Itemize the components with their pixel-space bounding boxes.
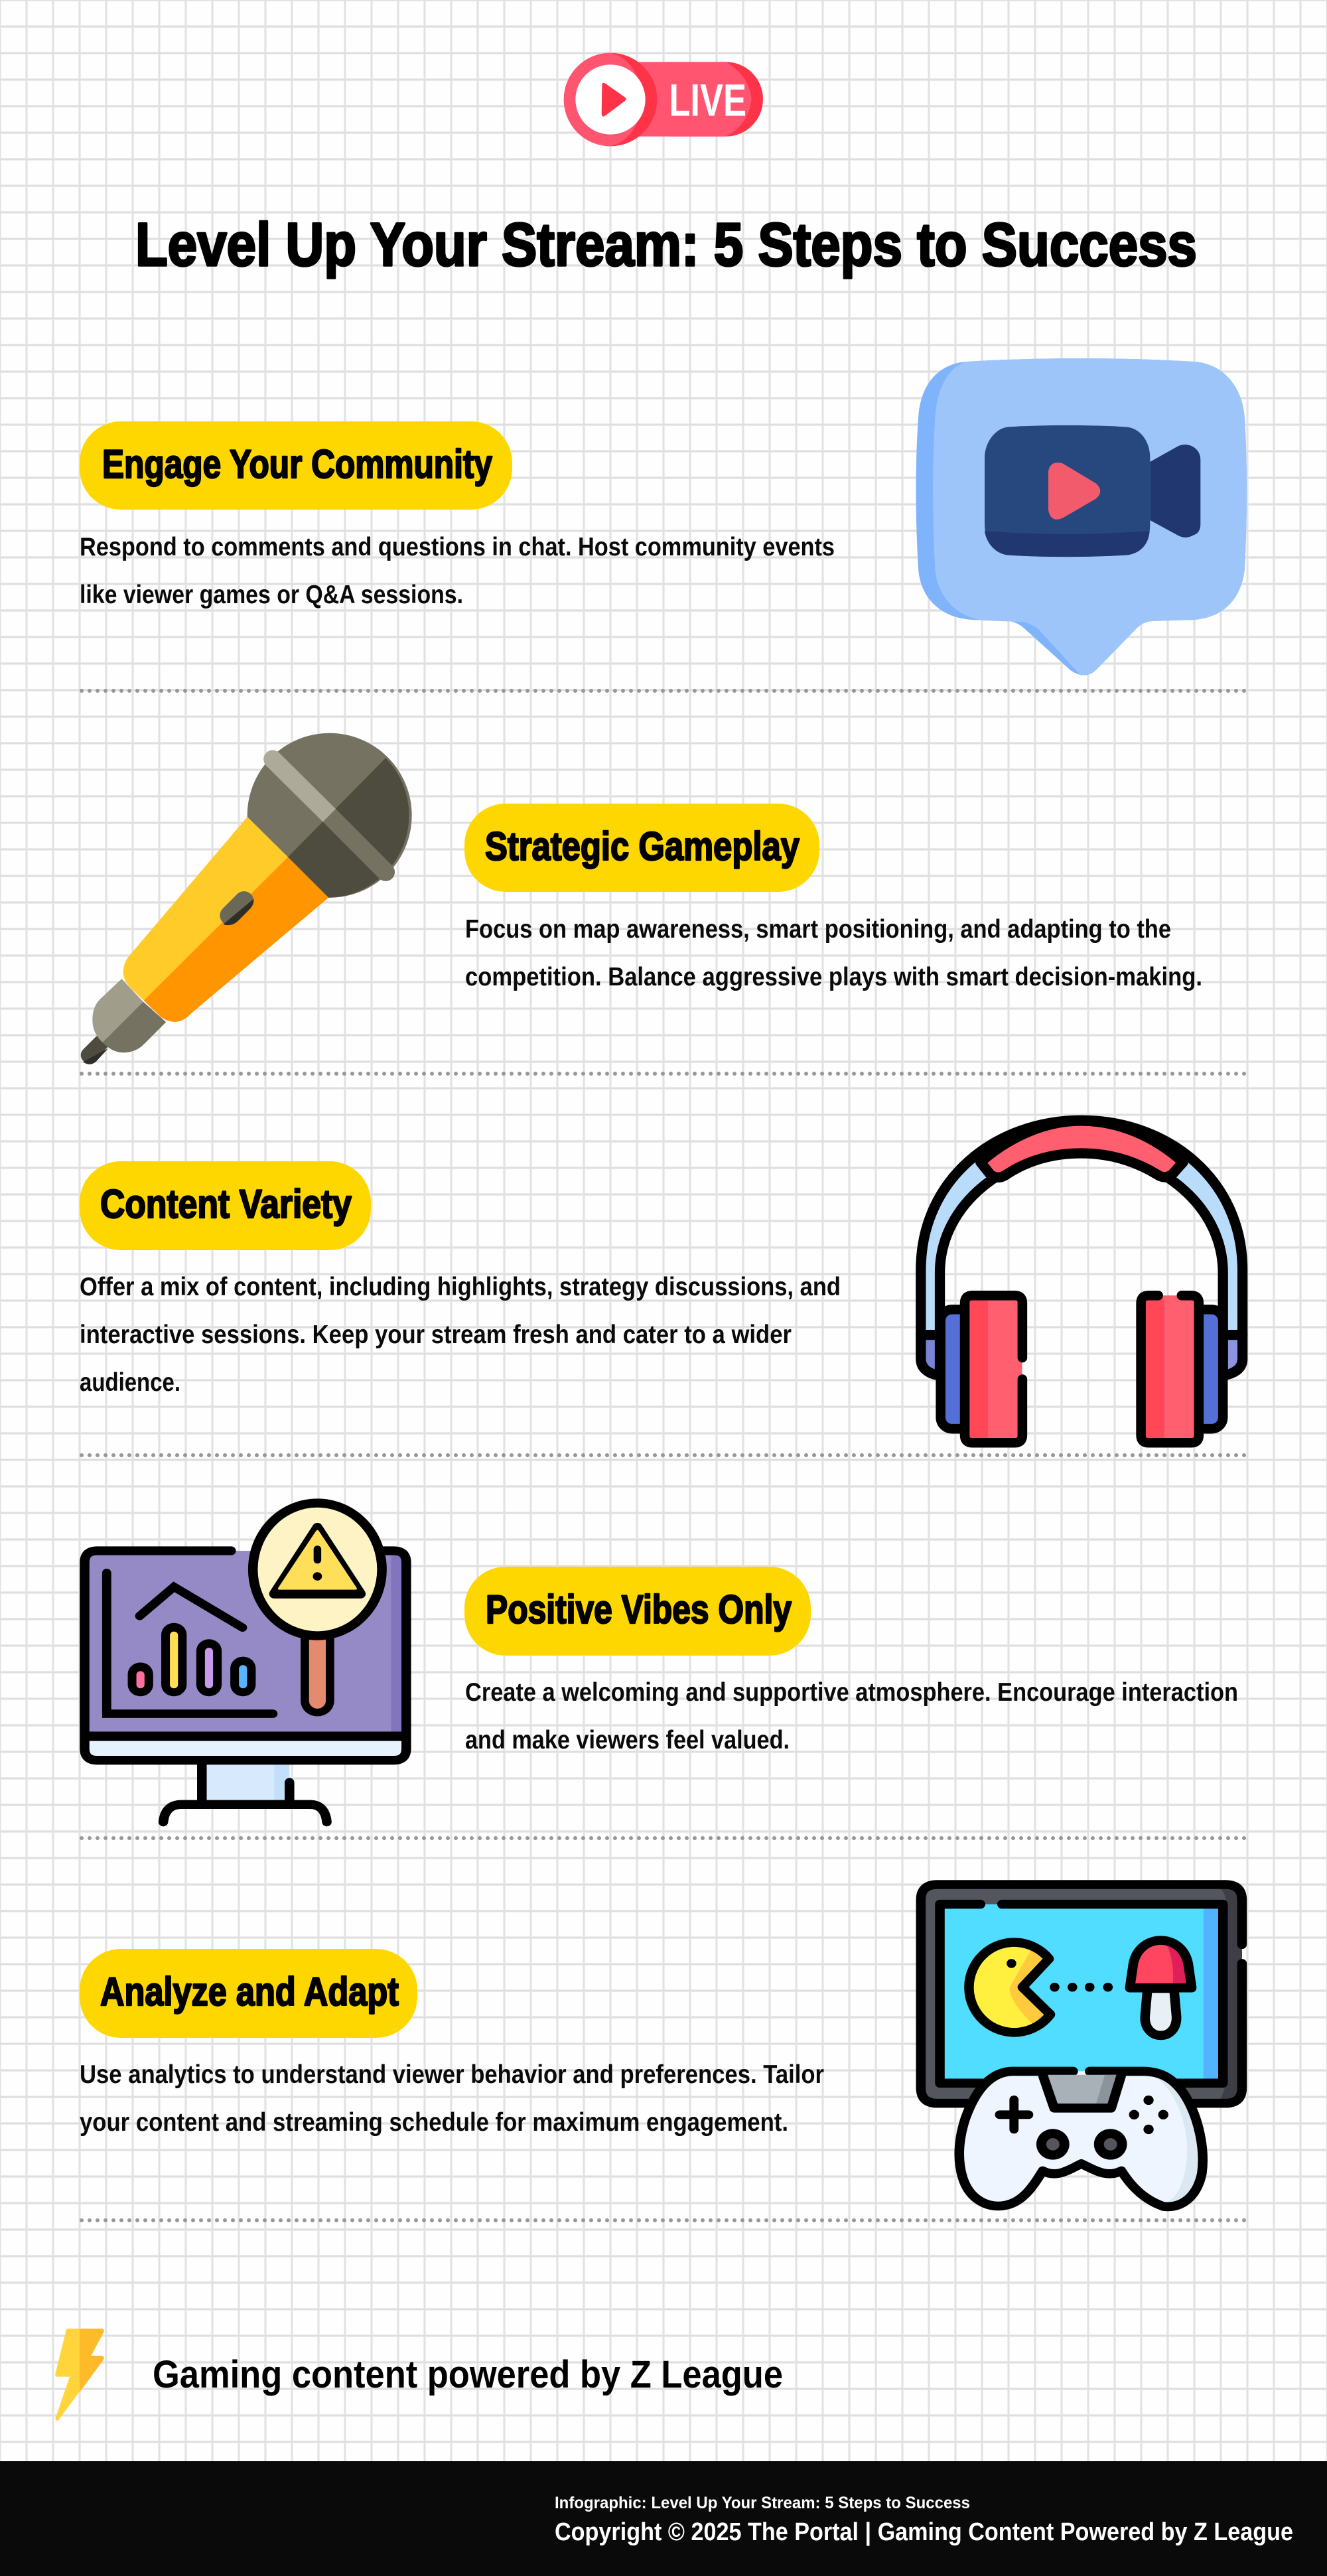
icon: retro game screen and controller	[921, 1885, 1242, 2206]
text block: audience.	[80, 1368, 180, 1397]
divider 3	[82, 1453, 1245, 1457]
icon: video chat bubble	[916, 358, 1247, 676]
mushroom	[1130, 1940, 1192, 2035]
text block: and make viewers feel valued.	[465, 1726, 790, 1754]
bar chart	[141, 1634, 243, 1685]
pacman	[969, 1942, 1050, 2033]
text block: Offer a mix of content, including highlights, strategy discussions, and	[80, 1273, 841, 1301]
heading pill: Strategic Gameplay	[485, 824, 800, 869]
text block	[80, 2060, 824, 2137]
camera	[985, 425, 1200, 557]
heading pill	[80, 421, 512, 510]
icon: microphone	[83, 733, 412, 1064]
sponsor line: Gaming content powered by Z League	[153, 2353, 783, 2396]
text block: Create a welcoming and supportive atmosphere. Encourage interaction	[465, 1678, 1238, 1707]
title: Level Up Your Stream: 5 Steps to Success	[135, 211, 1197, 279]
panel: strategic gameplay	[83, 733, 1202, 1064]
divider 1	[82, 689, 1245, 693]
game controller	[959, 2071, 1203, 2206]
text block	[465, 1678, 1238, 1754]
icon: analytics monitor with warning magnifier	[84, 1503, 406, 1822]
panel: analyze and adapt	[80, 1885, 1242, 2206]
heading pill	[464, 804, 819, 892]
icon: lightning bolt	[55, 2328, 104, 2421]
divider 2	[82, 1072, 1245, 1076]
panel: positive vibes only	[84, 1503, 1238, 1822]
text block: Use analytics to understand viewer behavior and preferences. Tailor	[80, 2060, 824, 2089]
text block: like viewer games or Q&A sessions.	[80, 581, 463, 609]
plug	[83, 1042, 108, 1064]
text block: your content and streaming schedule for maximum engagement.	[80, 2108, 788, 2137]
divider 4	[82, 1836, 1245, 1840]
footer band	[0, 2461, 1327, 2576]
right ear cup	[1141, 1295, 1199, 1443]
heading pill: Content Variety	[100, 1182, 352, 1226]
chart axes and trend line	[107, 1573, 273, 1714]
heading pill	[464, 1567, 811, 1656]
icon: headphones	[921, 1120, 1243, 1443]
text block: Focus on map awareness, smart positioning, and adapting to the	[465, 915, 1171, 944]
panel: engage your community	[80, 358, 1247, 676]
footer title: Infographic: Level Up Your Stream: 5 Steps to Success	[555, 2494, 970, 2512]
heading pill: Analyze and Adapt	[100, 1969, 399, 2014]
heading pill	[80, 1161, 371, 1250]
left ear cup	[965, 1295, 1022, 1443]
screen frame	[921, 1885, 1242, 2104]
icon: LIVE badge	[564, 53, 763, 146]
heading pill: Engage Your Community	[102, 442, 493, 486]
text block: Respond to comments and questions in chat. Host community events	[80, 533, 835, 561]
text block	[80, 1273, 841, 1397]
text block	[465, 915, 1202, 991]
icon: LIVE badge: LIVE	[669, 74, 746, 125]
microphone head	[247, 733, 412, 898]
text block: interactive sessions. Keep your stream fresh and cater to a wider	[80, 1321, 792, 1349]
panel: content variety	[80, 1120, 1243, 1443]
microphone body	[123, 817, 328, 1022]
magnifier	[253, 1503, 382, 1701]
dots	[1050, 1983, 1113, 1991]
heading pill: Positive Vibes Only	[486, 1587, 792, 1632]
heading pill	[80, 1949, 417, 2038]
text block	[80, 533, 835, 609]
screen	[940, 1904, 1223, 2083]
divider 5	[82, 2218, 1245, 2222]
text block: competition. Balance aggressive plays with smart decision-making.	[465, 963, 1202, 991]
